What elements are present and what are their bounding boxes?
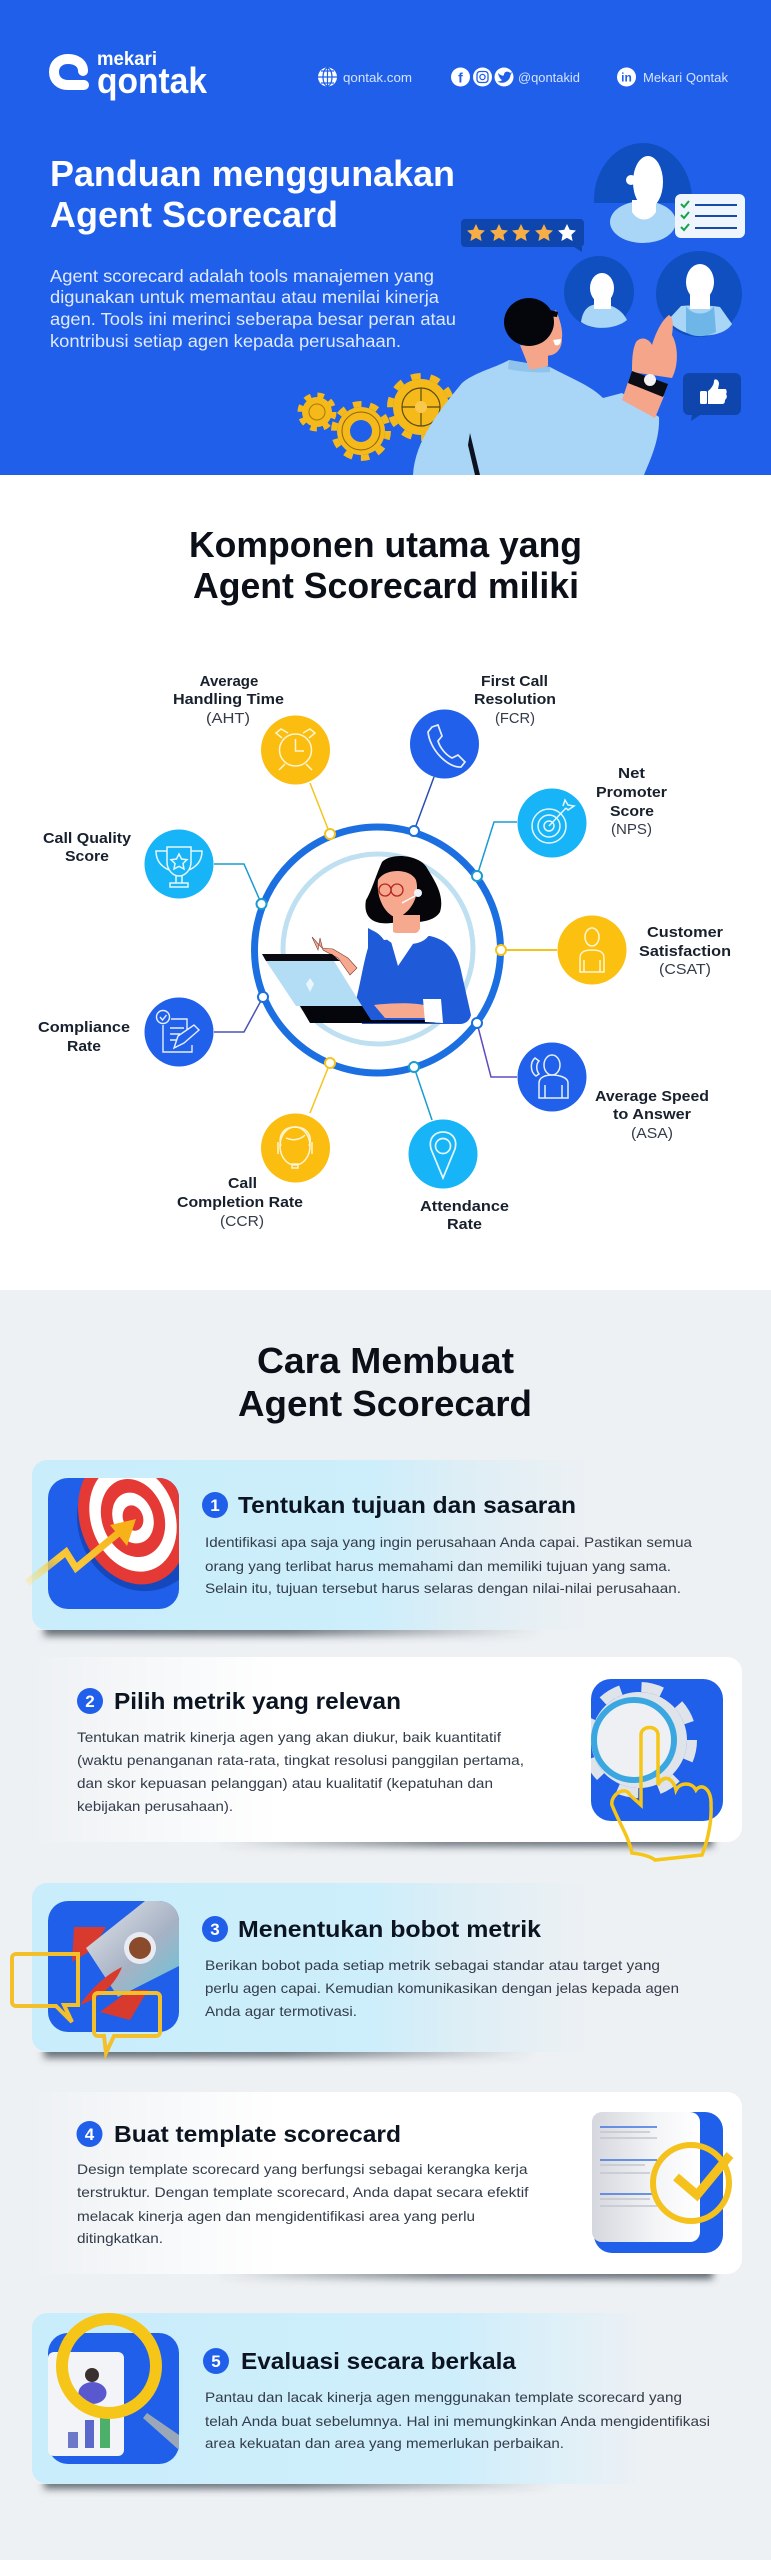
metric: net promoter score: Score — [610, 803, 654, 820]
step description: Anda agar termotivasi. — [205, 2003, 357, 2019]
metric: call quality score: Call Quality — [43, 830, 132, 847]
step title: Evaluasi secara berkala — [241, 2348, 516, 2374]
metric: net promoter score: Net — [618, 765, 645, 782]
step description: telah Anda buat sebelumnya. Hal ini memungkinkan Anda mengidentifikasi — [205, 2413, 710, 2429]
heading: cara membuat: Cara Membuat — [257, 1340, 514, 1381]
intro paragraph: agen. Tools ini merinci seberapa besar peran atau — [50, 309, 456, 329]
logo: mekari qontak: qontak — [97, 60, 208, 101]
metric: customer satisfaction: (CSAT) — [659, 961, 711, 978]
contact: website — [318, 68, 412, 87]
step description: perlu agen capai. Kemudian komunikasikan dengan jelas kepada agen — [205, 1980, 679, 1996]
step description: kebijakan perusahaan). — [77, 1798, 233, 1814]
metric: customer satisfaction: Satisfaction — [639, 943, 731, 960]
icon: document with check mark — [592, 2112, 730, 2253]
panel: main components — [0, 475, 771, 1290]
hub rings — [254, 827, 500, 1073]
step description — [205, 1957, 679, 2019]
step title: Tentukan tujuan dan sasaran — [238, 1492, 576, 1518]
step description: Pantau dan lacak kinerja agen menggunakan template scorecard yang — [205, 2389, 682, 2405]
metric: average speed to answer: (ASA) — [631, 1125, 673, 1142]
metric: call completion rate — [177, 1114, 330, 1230]
contact: social media: @qontakid — [518, 70, 580, 85]
heading: komponen utama: Agent Scorecard miliki — [193, 565, 579, 606]
connector lines — [214, 777, 557, 1120]
step 1 card — [25, 1460, 692, 1642]
metric: customer satisfaction — [558, 916, 731, 984]
contact: linkedin: Mekari Qontak — [643, 70, 728, 85]
metric: average handling time: (AHT) — [206, 710, 250, 727]
step description: (waktu penanganan rata-rata, tingkat resolusi panggilan pertama, — [77, 1752, 524, 1768]
step description: ditingkatkan. — [77, 2230, 163, 2246]
metric: net promoter score: Promoter — [596, 784, 667, 801]
step description — [77, 2161, 529, 2246]
step number 4 — [76, 2121, 102, 2147]
metric: first call resolution: (FCR) — [495, 710, 535, 727]
step number 1: 1 — [210, 1496, 220, 1515]
step description — [205, 2389, 710, 2451]
metric: average handling time: Handling Time — [173, 691, 284, 708]
step number 4: 4 — [85, 2125, 95, 2144]
metric: attendance rate: Attendance — [420, 1198, 509, 1215]
step number 2: 2 — [85, 1692, 95, 1711]
metric: call completion rate: Completion Rate — [177, 1194, 303, 1211]
metric: customer satisfaction: Customer — [647, 924, 723, 941]
step description: Design template scorecard yang berfungsi sebagai kerangka kerja — [77, 2161, 528, 2177]
logo: mekari qontak: mekari — [97, 49, 157, 70]
intro paragraph — [50, 266, 456, 351]
step 2 card — [30, 1657, 742, 1860]
contact: linkedin: in — [621, 70, 632, 84]
icon: thumbs up bubble — [683, 373, 741, 421]
panel: hero — [0, 0, 771, 475]
heading: komponen utama: Komponen utama yang — [189, 524, 582, 565]
metric: net promoter score — [518, 765, 667, 858]
step number 1 — [202, 1492, 228, 1518]
heading: cara membuat: Agent Scorecard — [238, 1383, 532, 1424]
heading: komponen utama — [189, 524, 582, 606]
icon: star rating bubble — [461, 219, 584, 252]
panel: how to build — [10, 1346, 742, 2496]
step description: Identifikasi apa saja yang ingin perusahaan Anda capai. Pastikan semua — [205, 1534, 692, 1550]
step description: Selain itu, tujuan tersebut harus selaras dengan nilai-nilai perusahaan. — [205, 1580, 681, 1596]
step number 3: 3 — [210, 1920, 220, 1939]
step 5 card — [32, 2313, 742, 2489]
metric: call quality score: Score — [65, 848, 109, 865]
icon: right agent profile — [656, 251, 742, 337]
step description — [205, 1534, 692, 1596]
step number 3 — [202, 1916, 228, 1942]
title: Agent Scorecard — [50, 194, 338, 235]
step description: area kekuatan dan area yang memerlukan perbaikan. — [205, 2435, 564, 2451]
icon: rocket with speech bubbles — [12, 1901, 185, 2053]
metric: average speed to answer — [518, 1042, 709, 1142]
contact: social media — [451, 68, 580, 86]
metric: compliance rate: Rate — [67, 1038, 101, 1055]
metric: attendance rate: Rate — [447, 1216, 482, 1233]
metric: call completion rate: Call — [228, 1175, 257, 1192]
step number 5: 5 — [211, 2352, 221, 2371]
metric: compliance rate: Compliance — [38, 1019, 130, 1036]
icon: magnifier over profile — [48, 2319, 179, 2464]
step title: Menentukan bobot metrik — [238, 1916, 541, 1942]
metric: net promoter score: (NPS) — [611, 821, 652, 838]
step title: Buat template scorecard — [114, 2121, 401, 2147]
title: Panduan menggunakan — [50, 153, 455, 194]
contact: social media: f — [458, 70, 463, 86]
step title: Pilih metrik yang relevan — [114, 1688, 401, 1714]
contact: linkedin — [617, 68, 728, 86]
title — [50, 153, 455, 235]
step description: dan skor kepuasan pelanggan) atau kualitatif (kepatuhan dan — [77, 1775, 493, 1791]
ring nodes — [256, 826, 506, 1072]
step description: orang yang terlibat harus memahami dan memiliki tujuan yang sama. — [205, 1558, 671, 1574]
step 4 card — [30, 2092, 742, 2279]
metric: average handling time — [173, 673, 330, 784]
metric: average speed to answer: to Answer — [613, 1106, 691, 1123]
metric: first call resolution: Resolution — [474, 691, 556, 708]
intro paragraph: digunakan untuk memantau atau menilai kinerja — [50, 287, 439, 307]
icon: middle agent profile — [564, 256, 634, 328]
metric: attendance rate — [408, 1120, 509, 1233]
step 3 card — [12, 1883, 742, 2058]
step description — [77, 1729, 524, 1814]
metric: call quality score — [43, 830, 214, 898]
contact: website: qontak.com — [343, 70, 412, 85]
step number 2 — [77, 1688, 103, 1714]
icon: top agent profile — [594, 143, 692, 243]
step number 5 — [203, 2348, 229, 2374]
step description: terstruktur. Dengan template scorecard, Anda dapat secara efektif — [77, 2184, 529, 2200]
metric: first call resolution — [410, 673, 556, 778]
intro paragraph: Agent scorecard adalah tools manajemen yang — [50, 266, 434, 286]
intro paragraph: kontribusi setiap agen kepada perusahaan. — [50, 331, 401, 351]
icon: checklist card — [675, 194, 745, 238]
illustration: call centre agent with laptop — [262, 856, 471, 1024]
step description: Tentukan matrik kinerja agen yang akan diukur, baik kuantitatif — [77, 1729, 501, 1745]
metric: average speed to answer: Average Speed — [595, 1088, 709, 1105]
metric: average handling time: Average — [200, 673, 258, 690]
heading: cara membuat — [238, 1340, 532, 1424]
logo: mekari qontak — [54, 49, 208, 101]
metric: first call resolution: First Call — [481, 673, 548, 690]
step description: melacak kinerja agen dan mengidentifikasi area yang perlu — [77, 2208, 475, 2224]
metric: call completion rate: (CCR) — [220, 1213, 264, 1230]
icon: gear with pointing hand — [586, 1679, 723, 1860]
icon: target with arrow — [25, 1478, 179, 1609]
icon: gears — [300, 376, 452, 458]
step description: Berikan bobot pada setiap metrik sebagai standar atau target yang — [205, 1957, 660, 1973]
illustration: man pointing at agents — [413, 298, 677, 475]
metric: compliance rate — [38, 998, 214, 1066]
